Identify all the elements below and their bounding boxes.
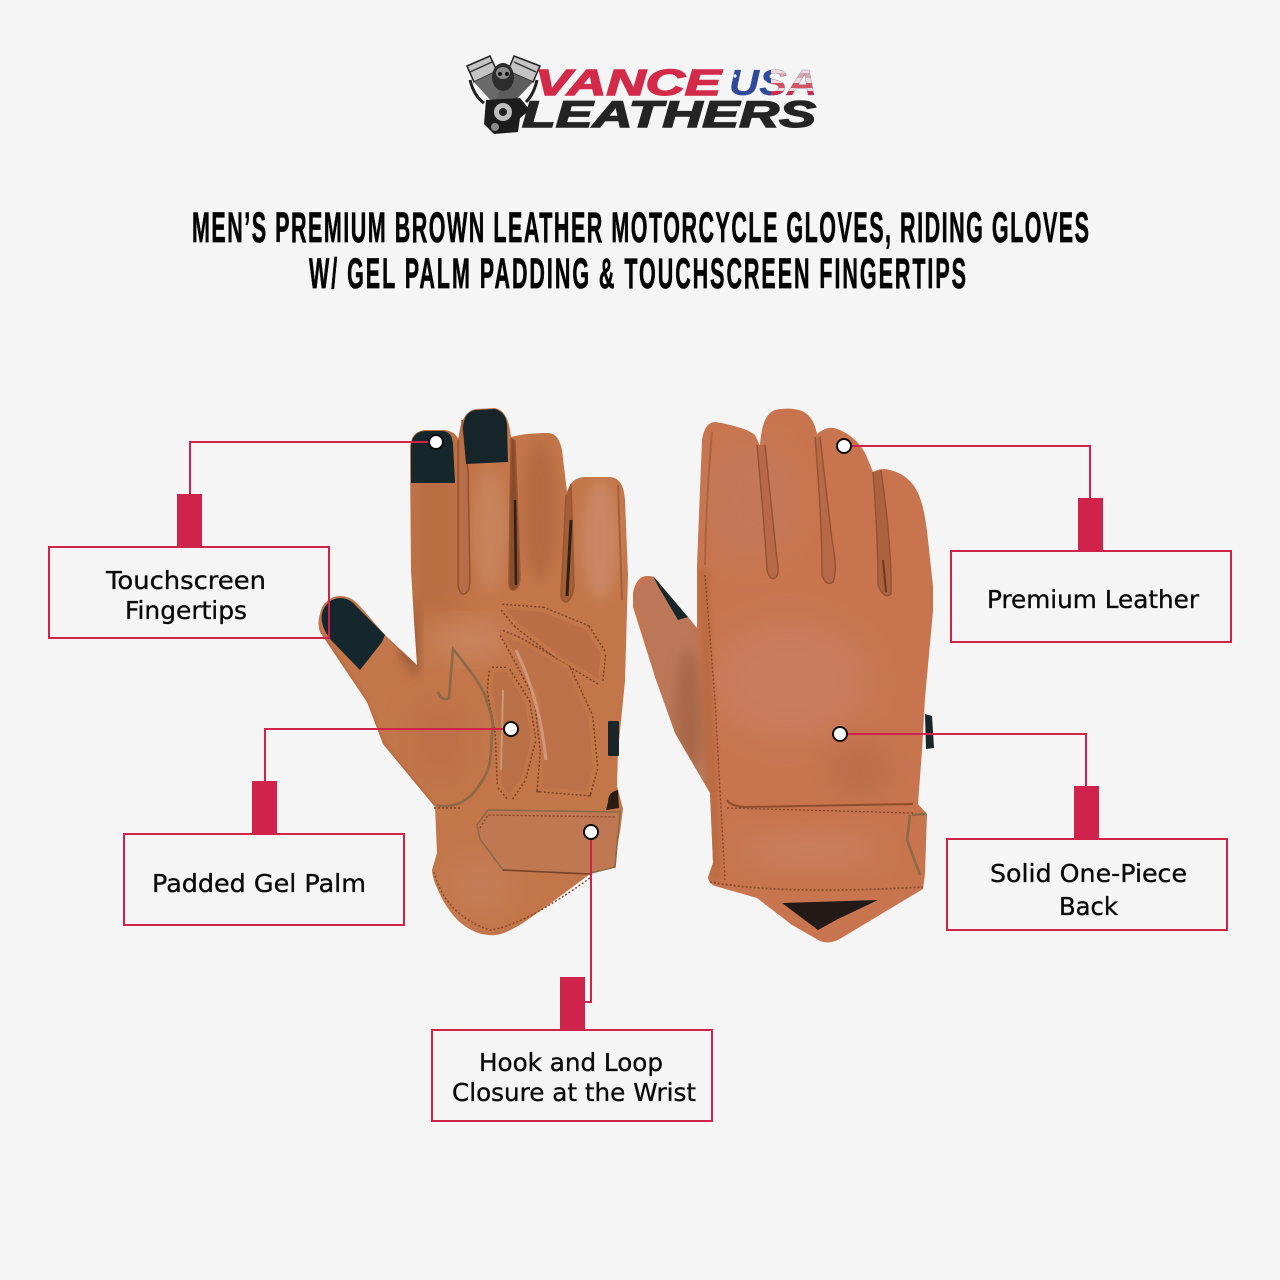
callout: touchscreen fingertips: Touchscreen: [105, 566, 266, 595]
wordmark: USA: USA: [729, 62, 817, 103]
callout: premium leather: Premium Leather: [987, 585, 1200, 614]
wrist strap: [434, 790, 620, 930]
callout: hook and loop closure: [432, 825, 712, 1121]
callout: padded gel palm: [124, 722, 518, 925]
callout: solid one-piece back: Solid One-Piece: [990, 859, 1187, 888]
callout: touchscreen fingertips: [49, 435, 443, 638]
finger slots: [458, 420, 622, 602]
thumb seam: [437, 649, 493, 806]
callout: premium leather: [837, 439, 1231, 642]
logo: Vance USA Leathers: [467, 56, 817, 135]
inner lining: [782, 900, 878, 930]
touchscreen tips (black leather): [322, 409, 508, 670]
glove: palm side: [318, 408, 628, 936]
callout: hook and loop closure: Closure at the Wrist: [452, 1078, 696, 1107]
wordmark: Vance: VANCE: [535, 62, 722, 103]
small side tag: [925, 714, 934, 749]
callout: padded gel palm: Padded Gel Palm: [152, 869, 366, 898]
title: MEN’S PREMIUM BROWN LEATHER MOTORCYCLE GLOVES, RIDING GLOVES: [192, 204, 1089, 252]
wrist cuff seam: [710, 800, 926, 890]
thumb black edge: [653, 576, 688, 620]
icon: engine with skull: [467, 56, 540, 134]
callout: hook and loop closure: Hook and Loop: [479, 1048, 663, 1077]
callout: solid one-piece back: Back: [1059, 892, 1118, 921]
callout: solid one-piece back: [833, 727, 1227, 930]
title: [192, 204, 1089, 298]
small label tag: [608, 721, 619, 756]
finger slots: [705, 432, 891, 596]
glove: back side: [625, 400, 945, 950]
callout: touchscreen fingertips: Fingertips: [125, 596, 247, 625]
gel palm pads: [490, 607, 603, 798]
title: W/ GEL PALM PADDING & TOUCHSCREEN FINGERTIPS: [309, 250, 966, 298]
wordmark: Leathers: LEATHERS: [522, 94, 816, 135]
side seam: [705, 575, 725, 880]
